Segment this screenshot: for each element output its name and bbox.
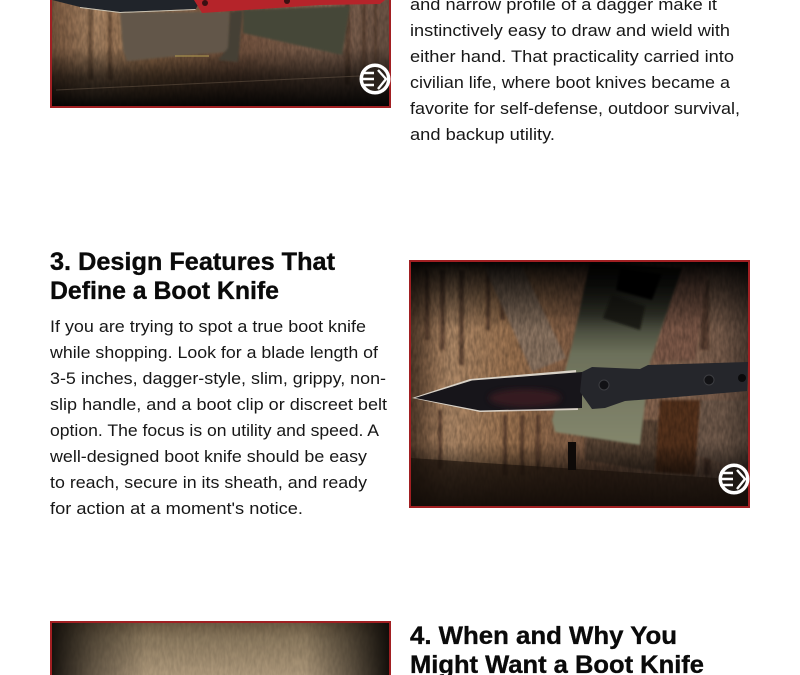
ledge [411, 458, 748, 506]
paragraph: dagger profile continued: civilian life, where boot knives became a [410, 73, 731, 92]
photo: black dagger on olive magazine [409, 260, 750, 508]
paragraph: design features: while shopping. Look for a blade length of [49, 343, 378, 362]
paragraph: dagger profile continued: either hand. That practicality carried into [410, 47, 734, 66]
paragraph: design features [49, 317, 387, 518]
heading: section 3: Define a Boot Knife [50, 277, 279, 305]
wood grain stripes [425, 270, 711, 475]
photo: red-handled knife on magazines [50, 0, 391, 108]
heading: section 4 [410, 622, 704, 675]
paragraph: dagger profile continued: favorite for self-defense, outdoor survival, [410, 99, 740, 118]
photo: tan surface, cropped at page bottom [50, 621, 391, 675]
heading: section 3 [50, 248, 336, 305]
paragraph: dagger profile continued [410, 0, 740, 144]
dagger handle [580, 362, 748, 409]
heading: section 3: 3. Design Features That [50, 248, 336, 276]
paragraph: design features: slip handle, and a boot clip or discreet belt [50, 395, 387, 414]
icon: brand logo [718, 464, 750, 494]
paragraph: dagger profile continued: instinctively easy to draw and wield with [410, 21, 730, 40]
olive magazine [552, 262, 682, 445]
paragraph: design features: 3-5 inches, dagger-style, slim, grippy, non- [50, 369, 386, 388]
dagger blade [412, 370, 578, 412]
paragraph: dagger profile continued: and backup utility. [410, 125, 555, 144]
paragraph: design features: well-designed boot knife should be easy [49, 447, 368, 466]
paragraph: design features: for action at a moment's notice. [50, 499, 303, 518]
paragraph: design features: option. The focus is on utility and speed. A [50, 421, 380, 440]
heading: section 4: 4. When and Why You [410, 622, 677, 650]
paragraph: design features: If you are trying to spot a true boot knife [50, 317, 366, 336]
icon: brand logo [360, 64, 390, 94]
paragraph: design features: to reach, secure in its sheath, and ready [50, 473, 368, 492]
